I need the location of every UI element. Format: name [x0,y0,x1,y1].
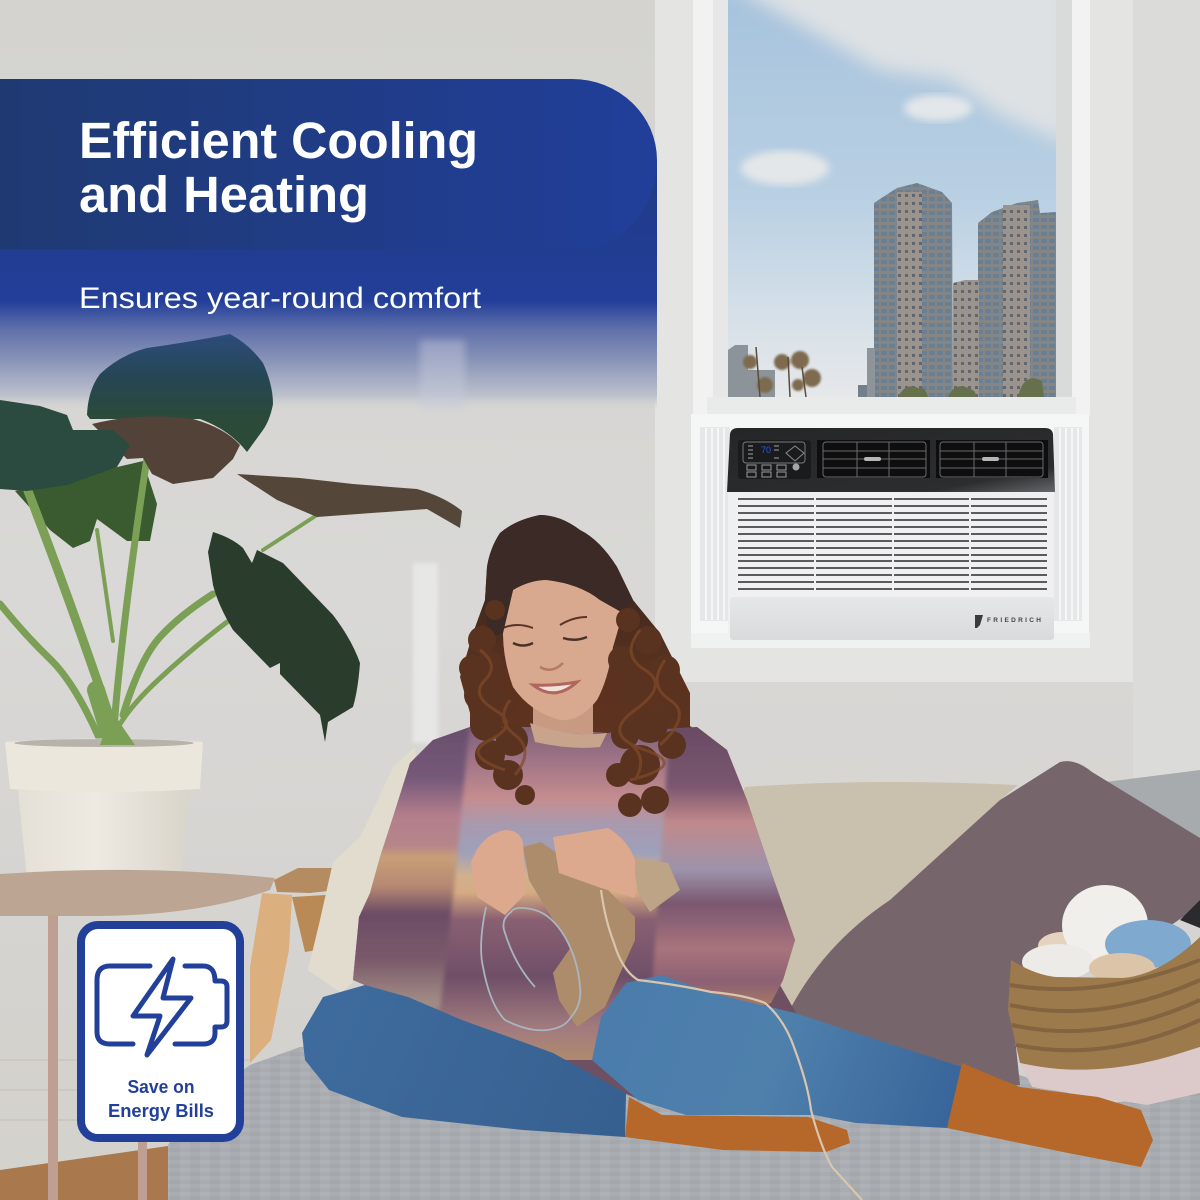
side panels [691,414,1090,648]
title: Efficient Cooling [79,112,478,169]
towers [728,183,1056,397]
wall light beam [413,563,438,743]
yarn basket [1008,885,1200,1105]
side table [0,870,275,1200]
control band [727,428,1055,492]
hair curls [478,630,679,780]
vents [817,440,1048,478]
unit body [728,488,1054,638]
armchair wood [250,868,368,1063]
window with sky and towers [693,0,1090,415]
long brown leaf [237,474,462,528]
hair curly masses [459,600,689,817]
knitted piece [523,842,635,1027]
purple cushion [780,761,1200,1090]
top leaf [87,334,273,452]
base panel [730,597,1054,640]
wooden floor [0,1145,180,1200]
blue fade behind header [0,160,657,412]
badge: save on energy bills [81,925,240,1138]
sofa back right [1105,770,1200,850]
title line two: and Heating [79,166,369,223]
badge label: Save on [128,1076,194,1097]
collar [530,723,607,748]
subtitle: Ensures year-round comfort [79,282,482,315]
light patch in fade [420,340,465,410]
brown leaf [92,416,240,484]
window sill [707,397,1076,415]
brand logo [975,615,1041,628]
back leaf [15,461,157,548]
brand logo: FRIEDRICH [987,617,1041,624]
facial features [503,617,587,693]
air conditioner [691,414,1090,648]
cream blanket [308,747,420,993]
hands [471,828,635,915]
skirting board [0,1030,250,1170]
woman [302,515,1153,1200]
icon: battery with lightning bolt [97,959,227,1055]
window recess [655,0,1200,790]
jeans right leg [592,975,962,1128]
blue header panel [0,79,657,250]
knitting needle wire [481,907,580,1030]
under sweater [360,975,800,1100]
flower pot [5,738,203,907]
neck [533,695,593,735]
jeans left leg [302,985,626,1137]
sleeve cuff [632,857,680,912]
yarn thread [601,890,862,1200]
vent knobs [864,457,881,461]
tan throw [700,782,1018,1020]
big green leaf [208,532,360,742]
hair top [485,515,633,640]
front grille [738,499,1047,589]
clouds [720,0,1070,185]
plant [0,334,462,907]
sweater [353,727,795,1060]
face [503,580,623,720]
stems [0,458,317,742]
badge label line two: Energy Bills [108,1100,214,1121]
sofa [168,770,1200,1200]
left sock [625,1097,850,1152]
dark gap at sofa edge [1180,900,1200,928]
left leaf [0,400,130,491]
control panel: 70 [761,445,771,455]
right sock [947,1063,1153,1167]
hair back [460,515,727,760]
control panel [738,440,811,479]
seat blanket [168,1040,1200,1200]
